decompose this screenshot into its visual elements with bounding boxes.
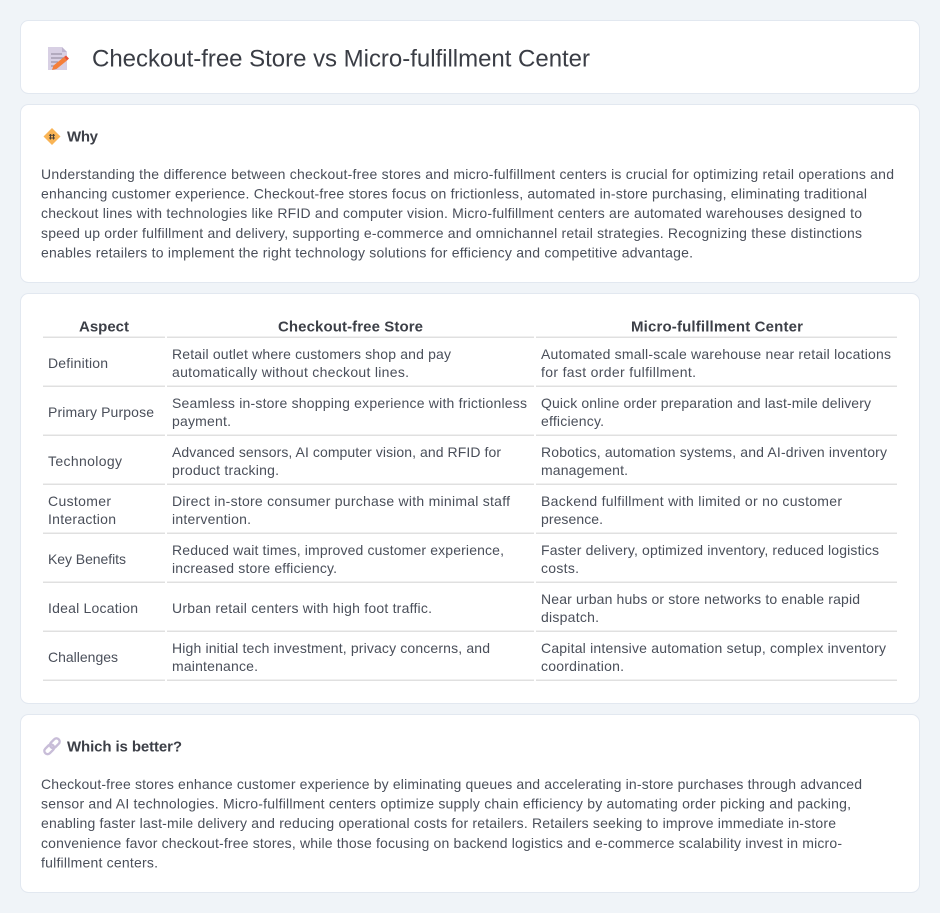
icon: memo with pencil: [48, 47, 69, 70]
row: definition: Retail outlet where customers shop and pay: [172, 346, 451, 362]
table header: Checkout-free Store: [278, 318, 423, 336]
row: ideal location: Near urban hubs or store networks to enable rapid: [541, 591, 860, 607]
row: customer interaction: Customer: [48, 493, 111, 509]
panel: comparison table: [20, 294, 920, 704]
text block: why paragraph: speed up order fulfillment and delivery, supporting e-commerce and omnichannel retail strategies. Recognizing these distinctions: [41, 225, 862, 241]
row: technology: Robotics, automation systems, and AI-driven inventory: [541, 444, 887, 460]
title: Checkout-free Store vs Micro-fulfillment Center: [92, 46, 590, 72]
row: definition: Definition: [48, 355, 108, 371]
row: customer interaction: Direct in-store consumer purchase with minimal staff: [172, 493, 510, 509]
row: key benefits: Faster delivery, optimized inventory, reduced logistics: [541, 542, 879, 558]
panel: which is better: [20, 714, 920, 892]
row: technology: Advanced sensors, AI computer vision, and RFID for: [172, 444, 501, 460]
row: key benefits: costs.: [541, 560, 579, 576]
text block: which is better paragraph: enabling faster last-mile delivery and reducing operational costs for retailers. Retailers seeking to improve immediate in-store: [41, 815, 836, 831]
text block: which is better paragraph: [41, 776, 862, 870]
row: customer interaction: intervention.: [172, 511, 251, 527]
row: definition: for fast order fulfillment.: [541, 364, 696, 380]
row: ideal location: dispatch.: [541, 609, 599, 625]
row: technology: [48, 444, 887, 478]
row: technology: management.: [541, 462, 628, 478]
row: challenges: coordination.: [541, 658, 624, 674]
text block: why paragraph: checkout lines with technologies like RFID and computer vision. Micro-fulfillment centers are automated warehouses designed to: [41, 205, 862, 221]
panel: why: [20, 104, 920, 282]
row: technology: product tracking.: [172, 462, 279, 478]
text block: which is better paragraph: fulfillment centers.: [41, 854, 158, 870]
row: challenges: High initial tech investment, privacy concerns, and: [172, 640, 490, 656]
row: key benefits: increased store efficiency.: [172, 560, 337, 576]
row: definition: [48, 346, 891, 380]
table header: [79, 318, 803, 336]
text block: which is better paragraph: convenience favor checkout-free stores, while those focusing on backend logistics and e-commerce scalability invest in micro-: [41, 835, 842, 851]
row: primary purpose: [48, 395, 871, 429]
heading: which is better: Which is better?: [67, 738, 182, 756]
row: challenges: Capital intensive automation setup, complex inventory: [541, 640, 886, 656]
row: ideal location: [48, 591, 860, 625]
row: customer interaction: presence.: [541, 511, 603, 527]
row: challenges: [48, 640, 886, 674]
row: primary purpose: payment.: [172, 413, 231, 429]
row: challenges: Challenges: [48, 649, 118, 665]
icon: chain link: [43, 737, 61, 755]
table header: Aspect: [79, 318, 129, 336]
row: technology: Technology: [48, 453, 122, 469]
row: ideal location: Ideal Location: [48, 600, 138, 616]
text block: why paragraph: enables retailers to implement the right technology solutions for efficiency and competitive advantage.: [41, 244, 693, 260]
row: challenges: maintenance.: [172, 658, 258, 674]
row: key benefits: [48, 542, 879, 576]
row: primary purpose: Primary Purpose: [48, 404, 154, 420]
row: key benefits: Key Benefits: [48, 551, 126, 567]
row: primary purpose: efficiency.: [541, 413, 604, 429]
text block: why paragraph: Understanding the difference between checkout-free stores and micro-fulfillment centers is crucial for optimizing retail operations and: [41, 166, 894, 182]
icon: diamond warning sign: [44, 128, 60, 145]
table header: Micro-fulfillment Center: [631, 318, 803, 336]
text block: which is better paragraph: sensor and AI technologies. Micro-fulfillment centers optimize supply chain efficiency by automating order picking and packing,: [41, 796, 851, 812]
row: customer interaction: [48, 493, 842, 527]
row: key benefits: Reduced wait times, improved customer experience,: [172, 542, 504, 558]
row: ideal location: Urban retail centers with high foot traffic.: [172, 600, 432, 616]
row: definition: Automated small-scale warehouse near retail locations: [541, 346, 891, 362]
row: customer interaction: Interaction: [48, 511, 116, 527]
row: primary purpose: Seamless in-store shopping experience with frictionless: [172, 395, 527, 411]
row: definition: automatically without checkout lines.: [172, 364, 409, 380]
text block: why paragraph: enhancing customer experience. Checkout-free stores focus on frictionless, automated in-store purchasing, eliminating traditional: [41, 186, 867, 202]
heading: why: Why: [67, 128, 99, 146]
text block: which is better paragraph: Checkout-free stores enhance customer experience by eliminating queues and accelerating in-store purchases through advanced: [41, 776, 862, 792]
panel: title card: [20, 20, 920, 94]
text block: why paragraph: [41, 166, 894, 260]
row: customer interaction: Backend fulfillment with limited or no customer: [541, 493, 842, 509]
row: primary purpose: Quick online order preparation and last-mile delivery: [541, 395, 871, 411]
